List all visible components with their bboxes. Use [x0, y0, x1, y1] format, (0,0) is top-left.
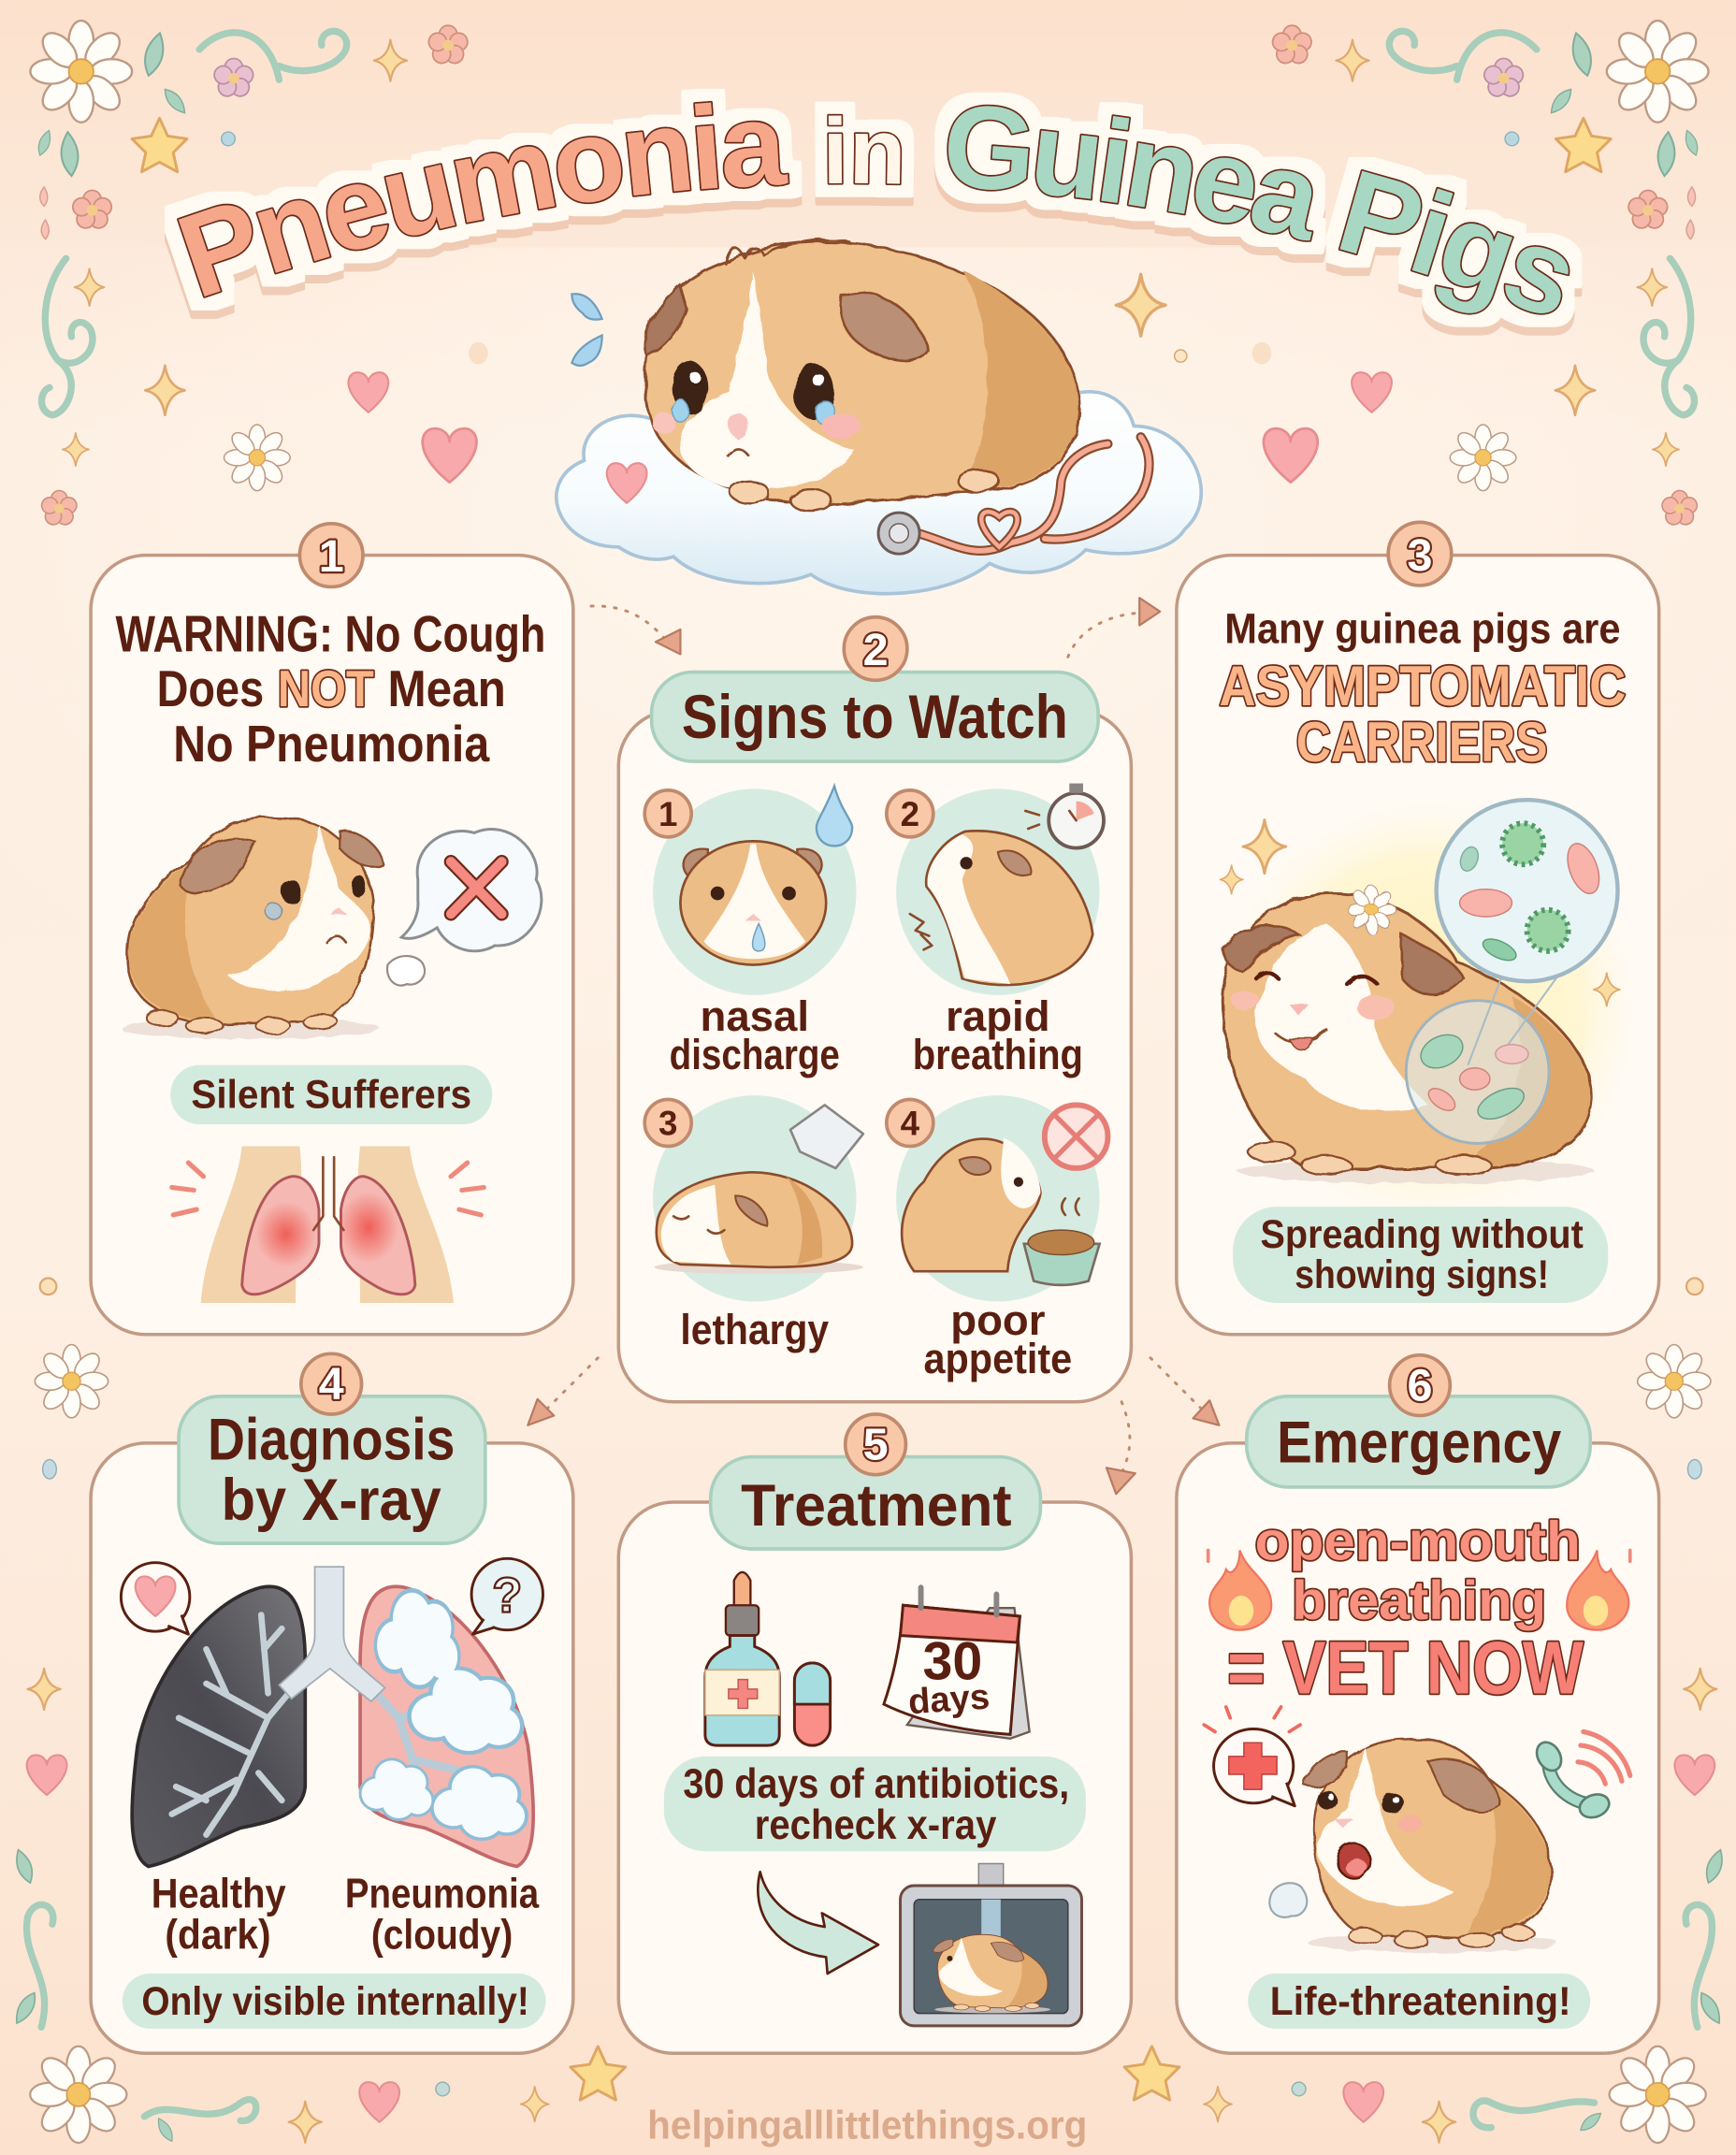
badge 3: 3: [1407, 530, 1432, 581]
title: Pneumonia: [165, 88, 803, 319]
decoration: top right corner: [1116, 21, 1709, 528]
header pill: Emergency: [1277, 1410, 1561, 1475]
header pill: by X-ray: [222, 1468, 441, 1533]
calendar 30 days: 30: [923, 1632, 982, 1692]
decoration: side ornaments: [11, 1279, 1727, 2027]
footer website: helpingalllittlethings.org: [647, 2103, 1087, 2148]
sign: lethargy label: lethargy: [680, 1306, 830, 1353]
badge 3: [1388, 522, 1452, 586]
vet now warning text: = VET NOW: [1227, 1626, 1584, 1709]
panel 1: no cough warning: [91, 524, 573, 1335]
medical cross speech bubble: [1204, 1707, 1300, 1806]
warning heading: [116, 605, 545, 773]
spreading pill: Spreading without: [1261, 1212, 1584, 1257]
sign: rapid breathing label: [913, 992, 1083, 1078]
antibiotics pill: [664, 1757, 1086, 1851]
question speech bubble: ?: [492, 1569, 522, 1624]
arrow to x-ray: [758, 1872, 878, 1974]
small heart on cloud: [607, 463, 647, 503]
calendar 30 days: [884, 1587, 1030, 1739]
antibiotics pill: 30 days of antibiotics,: [683, 1761, 1069, 1807]
header pill: Treatment: [741, 1473, 1012, 1539]
vet now warning text: breathing: [1292, 1570, 1546, 1631]
healthy dark lung: [132, 1586, 316, 1866]
sign: poor appetite label: [924, 1296, 1072, 1382]
sign: poor appetite label: appetite: [924, 1335, 1072, 1382]
dotted flow arrows: [528, 598, 1219, 1494]
warning heading: NOT: [278, 660, 374, 717]
panel 4: diagnosis by x-ray: [91, 1353, 573, 2053]
yellow glow: [1212, 790, 1646, 1230]
microscope bubble with germs: [1437, 800, 1618, 981]
title: Pigs: [1326, 157, 1583, 336]
lung labels: (dark): [165, 1913, 271, 1959]
carriers heading: Many guinea pigs are: [1224, 605, 1620, 653]
header pill: Diagnosis: [208, 1407, 455, 1472]
header pill: [1247, 1396, 1590, 1487]
warning heading: Does: [157, 660, 264, 717]
panel 2: signs to watch: [618, 617, 1131, 1402]
warning heading: No Pneumonia: [173, 716, 490, 773]
flame icons: [1208, 1550, 1630, 1630]
sign: nasal discharge label: nasal: [701, 992, 809, 1040]
worried guinea pig: [122, 817, 383, 1039]
sign: rapid breathing: 2: [901, 795, 919, 833]
hero pig body: [644, 239, 1079, 512]
badge 6: 6: [1407, 1360, 1432, 1410]
lung labels: Healthy: [152, 1872, 286, 1917]
badge 4: [301, 1353, 362, 1414]
life threatening pill: Life-threatening!: [1270, 1979, 1571, 2024]
badge 4: 4: [319, 1359, 344, 1410]
gasping guinea pig: [1304, 1739, 1557, 1953]
sparkles: [1220, 819, 1620, 1006]
sign: poor appetite: 4: [901, 1105, 920, 1143]
pneumonia cloudy lung: [346, 1586, 533, 1866]
carriers heading: ASYMPTOMATIC: [1219, 654, 1626, 717]
cloud: [557, 392, 1201, 594]
sign: lethargy: 3: [658, 1105, 677, 1143]
stethoscope: [878, 437, 1149, 554]
question speech bubble: [471, 1558, 542, 1634]
silent sufferers pill: [170, 1065, 492, 1124]
spreading pill: [1233, 1207, 1608, 1303]
sign: nasal discharge label: [670, 992, 840, 1078]
title: [165, 88, 1583, 336]
decoration: top left corner: [30, 21, 488, 528]
lung labels: (cloudy): [371, 1913, 513, 1959]
carriers heading: CARRIERS: [1296, 710, 1548, 774]
sign: lethargy: [644, 1095, 863, 1302]
panel 3: asymptomatic carriers: [1177, 522, 1659, 1335]
heart speech bubble: [121, 1563, 190, 1634]
vet now warning text: [1227, 1511, 1584, 1709]
lung labels: Pneumonia: [345, 1872, 539, 1917]
title: Guinea: [934, 92, 1326, 263]
trachea: [279, 1567, 385, 1701]
header pill: Signs to Watch: [682, 683, 1068, 752]
thought bubble with red cross: [401, 829, 542, 951]
inflamed lungs illustration: [172, 1146, 484, 1303]
sign: rapid breathing label: rapid: [946, 992, 1050, 1040]
x-ray machine with guinea pig: [901, 1863, 1081, 2026]
sign: poor appetite label: poor: [950, 1296, 1046, 1344]
warning heading: WARNING: No Cough: [116, 605, 545, 662]
sign: nasal discharge: 1: [658, 795, 677, 833]
carriers heading: [1219, 605, 1626, 774]
sign: nasal discharge: [644, 786, 857, 995]
title: in: [815, 101, 915, 206]
spreading pill: showing signs!: [1295, 1252, 1549, 1297]
breath puff: [1269, 1883, 1307, 1917]
only visible internally pill: Only visible internally!: [141, 1979, 529, 2024]
cough puff: [387, 956, 425, 986]
badge 2: [844, 617, 907, 680]
phone icon with signal: [1532, 1731, 1630, 1821]
badge 5: 5: [863, 1419, 889, 1469]
silent sufferers pill: Silent Sufferers: [191, 1072, 471, 1117]
sign: rapid breathing label: breathing: [913, 1031, 1083, 1078]
panel 6: emergency: [1177, 1355, 1659, 2053]
header pill: [179, 1396, 485, 1543]
badge 5: [846, 1414, 905, 1475]
tear drops: [571, 294, 602, 366]
header pill: [652, 673, 1098, 761]
sign: nasal discharge label: discharge: [670, 1031, 840, 1078]
germs magnified over body: [1406, 973, 1560, 1144]
warning heading: Mean: [387, 660, 506, 717]
badge 2: 2: [863, 625, 889, 675]
hero illustration: sad guinea pig on cloud: [557, 239, 1201, 594]
happy guinea pig: [1222, 886, 1595, 1183]
lung labels: [152, 1872, 539, 1959]
header pill: [711, 1457, 1040, 1549]
calendar 30 days: days: [907, 1676, 991, 1722]
sign: rapid breathing: [887, 784, 1104, 995]
badge 1: 1: [319, 531, 344, 582]
panel 5: treatment: [618, 1414, 1131, 2053]
vet now warning text: open-mouth: [1255, 1511, 1581, 1572]
antibiotics bottle and capsule: [705, 1572, 831, 1745]
antibiotics pill: recheck x-ray: [755, 1802, 997, 1848]
decoration: bottom border: [30, 2047, 1706, 2144]
sign: poor appetite: [887, 1095, 1107, 1302]
badge 1: [299, 524, 363, 586]
badge 6: [1390, 1355, 1450, 1415]
